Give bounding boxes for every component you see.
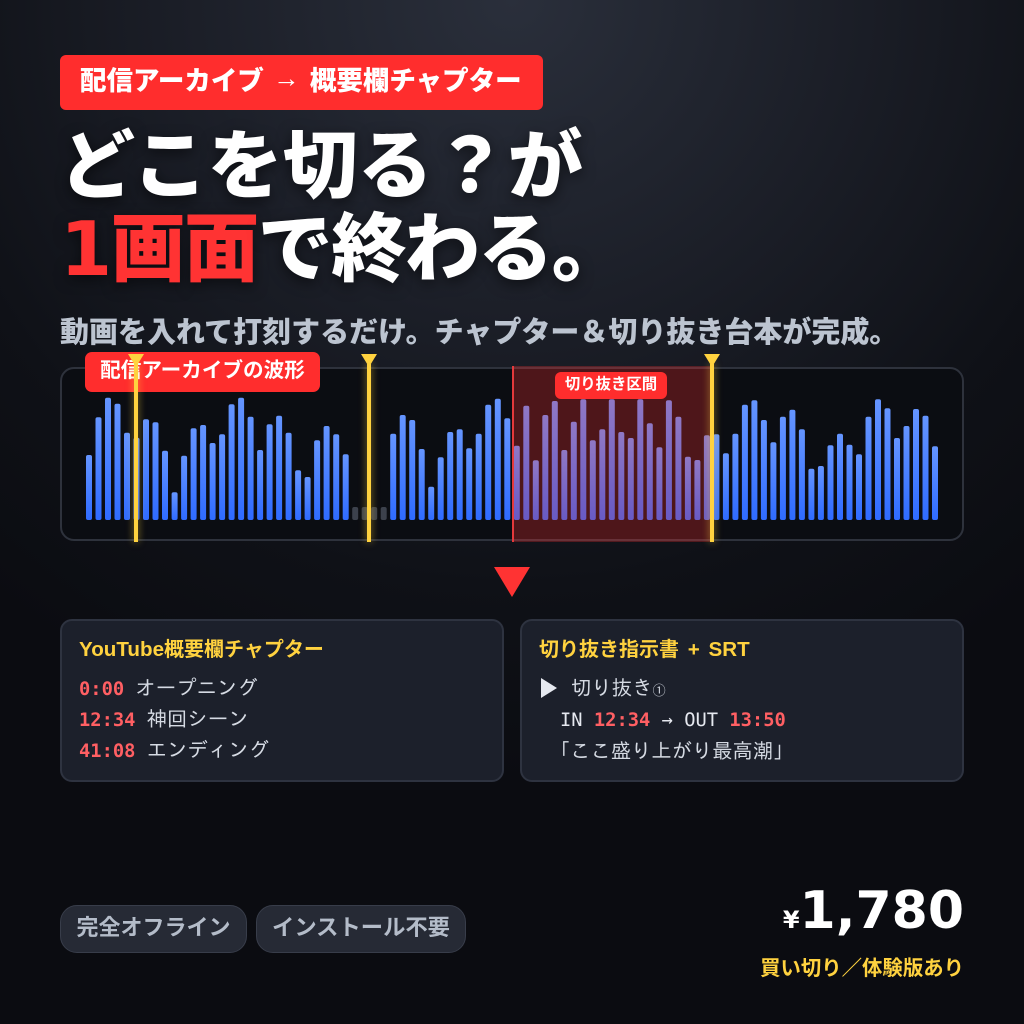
- chapter row 1: 0:00 オープニング: [79, 678, 258, 700]
- label: clip range: [555, 372, 667, 399]
- headline: 1画面で終わる。: [60, 205, 625, 293]
- chapter row 2: 12:34 神回シーン: [79, 709, 249, 731]
- top tag: [60, 55, 543, 110]
- card heading: 切り抜き指示書 + SRT: [539, 637, 750, 661]
- card heading: YouTube概要欄チャプター: [79, 637, 324, 661]
- headline: どこを切る？が: [60, 122, 583, 210]
- panel: YouTube chapters: [60, 619, 504, 782]
- headline: [60, 122, 625, 293]
- pill: offline: [60, 905, 247, 953]
- marker 1: [128, 354, 144, 546]
- pill: offline: 完全オフライン: [76, 916, 230, 941]
- clip title: 切り抜き①: [571, 678, 666, 699]
- chapter row 3: 41:08 エンディング: [79, 740, 269, 762]
- pill: no install: インストール不要: [272, 915, 450, 941]
- marker 3: [704, 354, 720, 546]
- waveform bars: [86, 398, 938, 520]
- label: waveform: [85, 352, 320, 392]
- pill: no install: [256, 905, 466, 953]
- price: ¥1,780: [783, 881, 964, 941]
- label: waveform: 配信アーカイブの波形: [100, 358, 305, 382]
- subheading: 動画を入れて打刻するだけ。チャプター＆切り抜き台本が完成。: [60, 315, 898, 349]
- price note: 買い切り／体験版あり: [760, 956, 964, 980]
- label: clip range: 切り抜き区間: [565, 375, 657, 393]
- in and out times: IN 12:34 → OUT 13:50: [560, 710, 786, 731]
- top tag: 配信アーカイブ → 概要欄チャプター: [80, 63, 522, 97]
- play icon: [541, 678, 557, 698]
- panel: clip instructions: [520, 619, 964, 782]
- waveform panel: [60, 367, 964, 541]
- arrow down: [494, 567, 530, 597]
- marker 2: [361, 354, 377, 546]
- clip quote: 「ここ盛り上がり最高潮」: [550, 741, 793, 761]
- clip range highlight: [512, 366, 712, 542]
